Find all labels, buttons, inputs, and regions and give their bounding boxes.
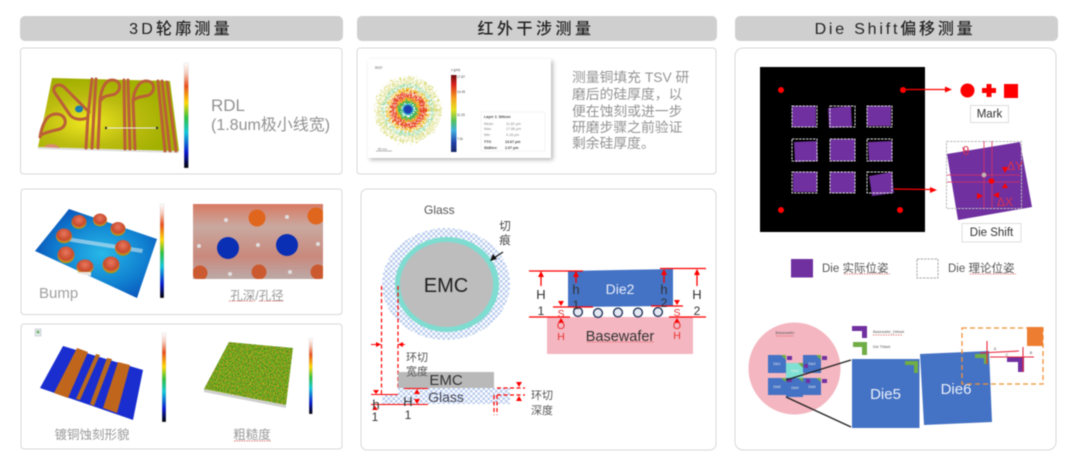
basewafer circle: Die5: [773, 385, 781, 389]
Die5 enlarged: Die5: [870, 386, 901, 403]
statistics box: Min:: [484, 133, 491, 137]
die shift detail: ΔY: [1007, 159, 1023, 173]
die height dimension lines: 1: [538, 304, 545, 318]
basewafer circle: Die2: [808, 362, 816, 366]
dimensions h1 and H1: [371, 388, 428, 424]
die height dimension lines: O: [557, 320, 565, 332]
thickness colour scale: [451, 68, 465, 152]
die height dimension lines: O: [673, 320, 681, 332]
legend: bonding marks: [852, 326, 904, 355]
colour scale: [309, 338, 312, 414]
arrow to die shift: [894, 187, 937, 193]
solder bumps: [574, 308, 662, 317]
statistics box: StdDev:: [484, 146, 498, 150]
basewafer circle: [748, 322, 840, 414]
TSV thickness map card: [368, 59, 551, 158]
wafer map centre: [403, 104, 413, 114]
ring-cut depth guides: [494, 382, 525, 415]
description text: 磨后的硅厚度，以: [572, 87, 683, 102]
Die2 block: Die2: [606, 281, 635, 297]
dimensions h1 and H1: H: [403, 394, 413, 409]
die shift detail: ΔX: [997, 195, 1013, 209]
hole depth image: [192, 204, 326, 280]
die shift detail: θ: [963, 144, 970, 158]
die height dimension lines: 2: [661, 296, 668, 310]
basewafer circle: Die3: [791, 369, 799, 373]
legend: actual pose: [791, 259, 890, 278]
die height dimension lines: H: [536, 287, 546, 302]
colour scale: [184, 63, 188, 168]
RDL label: RDL: [211, 96, 245, 115]
basewafer circle: Die1: [773, 362, 781, 366]
statistics box: TTV:: [484, 140, 492, 144]
description text: 剩余硅厚度。: [572, 135, 655, 151]
heading: 红外干涉测量: 红外干涉测量: [477, 20, 595, 38]
heading: Die Shift偏移测量: Die Shift偏移测量: [815, 20, 975, 38]
Bump 3D profile: [35, 209, 157, 298]
arrow: cut mark: [490, 252, 503, 261]
offset detail: [962, 327, 1043, 384]
label: Mark: Mark: [977, 108, 1003, 120]
thickness colour scale: 11.03: [457, 113, 465, 117]
colour scale: [160, 204, 164, 298]
arrow to mark: [903, 86, 952, 92]
wafer with dies: [760, 67, 925, 232]
die height dimension lines: S: [673, 307, 681, 319]
EMC on glass cross-section: Glass: [428, 389, 464, 405]
RDL label: [211, 96, 330, 134]
die height dimension lines: S: [557, 308, 565, 320]
label: ring-cut depth: [531, 389, 553, 417]
basewafer circle: Die4: [791, 386, 799, 390]
die height dimension lines: H: [692, 287, 702, 302]
broken image icon: [35, 329, 41, 336]
label: ring-cut width: 环切: [406, 351, 428, 364]
thickness colour scale: 17.87: [457, 75, 465, 79]
Die2 block: [568, 269, 673, 307]
EMC on glass top view: [382, 228, 510, 340]
panel: glass and die cross-sections: [361, 189, 716, 450]
die height dimension lines: H: [557, 331, 565, 343]
statistics box: Mean:: [484, 122, 494, 126]
description text: 研磨步骤之前验证: [572, 119, 683, 135]
die height dimension lines: [529, 268, 706, 343]
heading: 红外干涉测量: [357, 16, 717, 41]
offset detail: C: [1006, 353, 1009, 357]
roughness label: 粗糙度: [233, 427, 271, 442]
label: ring-cut width: 宽度: [406, 364, 428, 378]
heading: 3D轮廓测量: [20, 16, 343, 41]
label: ring-cut width: [406, 351, 428, 378]
legend: actual pose: Die 实际位姿: [822, 261, 888, 275]
colour scale: [162, 333, 166, 422]
description text: [572, 70, 689, 151]
die height dimension lines: h: [572, 282, 580, 297]
basewafer circle: Die6: [808, 385, 816, 389]
plated copper profile: [40, 346, 143, 420]
thickness colour scale: z (μm): [451, 68, 460, 72]
statistics box: 11.82 μm: [506, 122, 521, 126]
die height dimension lines: H: [673, 330, 681, 342]
wafer map: [379, 81, 437, 139]
panel: RDL: [20, 48, 342, 174]
die height dimension lines: 2: [694, 304, 701, 318]
EMC on glass top view: EMC: [424, 275, 468, 297]
legend: theoretical pose: Die 理论位姿: [948, 261, 1014, 275]
thickness colour scale: 14.45: [457, 90, 465, 94]
statistics box: Max:: [484, 127, 492, 131]
EMC on glass cross-section: [382, 372, 510, 405]
TSV thickness map card: RST: [375, 66, 383, 70]
legend: bonding marks: Basewafer_DMark: [873, 330, 904, 334]
roughness profile: [204, 341, 294, 408]
thickness colour scale: 7.61: [457, 137, 463, 141]
label: Die Shift: Die Shift: [970, 227, 1014, 239]
die height dimension lines: 1: [573, 298, 580, 312]
offset detail: B: [1030, 351, 1033, 355]
Bump label: Bump: [39, 285, 78, 302]
label: cut mark: 切: [499, 220, 511, 233]
panel: etching and roughness: [21, 324, 342, 449]
hole label: 孔深/孔径: [230, 289, 284, 303]
die shift detail: [946, 141, 1032, 220]
scale bar: 50 mm: [378, 147, 388, 151]
legend: bonding marks: Die TMark: [873, 345, 891, 349]
panel: Die Shift: [735, 48, 1056, 450]
heading: 3D轮廓测量: 3D轮廓测量: [129, 20, 233, 38]
panel: IR interferometry: [357, 48, 716, 174]
RDL label: (1.8um极小线宽): [211, 116, 330, 134]
scale bar: [376, 147, 392, 151]
zoom lines: [786, 360, 851, 427]
statistics box: 13.67 μm: [505, 140, 520, 144]
description text: 测量铜填充 TSV 研: [572, 70, 689, 85]
label: Mark: [970, 106, 1008, 122]
Basewafer block: [547, 317, 693, 354]
description text: 便在蚀刻或进一步: [572, 104, 682, 119]
label: cut mark: [499, 220, 511, 247]
label: ring-cut depth: 深度: [531, 403, 553, 417]
Die5 enlarged: [852, 359, 920, 428]
EMC on glass cross-section: EMC: [429, 372, 463, 389]
RDL 3D profile: [38, 78, 179, 153]
basewafer circle: Basewafer: [776, 330, 795, 335]
die height dimension lines: h: [660, 282, 668, 297]
statistics box: 17.86 μm: [506, 127, 521, 131]
Die6 enlarged: Die6: [941, 381, 971, 398]
label: Glass: Glass: [424, 203, 455, 217]
offset detail: A: [994, 347, 997, 351]
label: Die Shift: [962, 224, 1021, 242]
statistics box: 4.18 μm: [506, 133, 519, 137]
heading: Die Shift偏移测量: [735, 16, 1058, 41]
label: cut mark: 痕: [499, 233, 511, 247]
statistics box: 2.07 μm: [505, 146, 518, 150]
Basewafer block: Basewafer: [586, 329, 654, 345]
mark symbols: [960, 84, 1018, 98]
Die6 enlarged: [920, 351, 992, 425]
etching label: 镀铜蚀刻形貌: [54, 427, 130, 442]
ring-cut width guides: [371, 286, 405, 394]
legend: theoretical pose: [917, 259, 1016, 278]
dimensions h1 and H1: h: [372, 397, 380, 412]
panel: Bump and hole: [21, 189, 342, 314]
statistics box: Layer 1: Silicon: [484, 115, 511, 119]
dimensions h1 and H1: 1: [372, 410, 379, 424]
label: ring-cut depth: 环切: [531, 389, 553, 402]
statistics box: [481, 112, 545, 151]
dimensions h1 and H1: 1: [405, 408, 412, 422]
